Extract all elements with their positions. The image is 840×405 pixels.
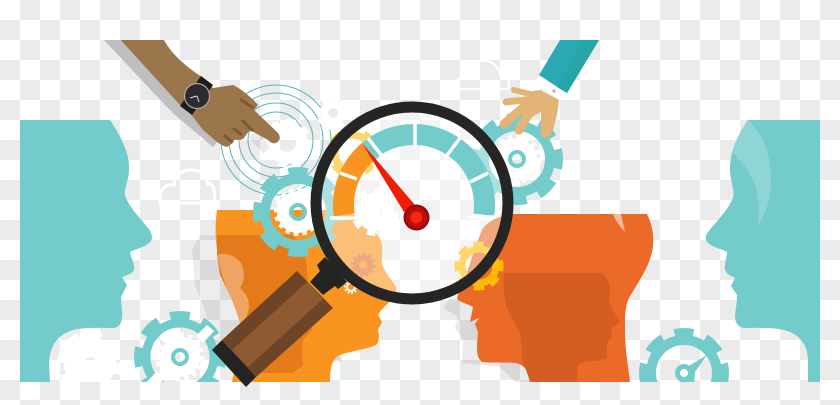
orange head [216,210,397,382]
gauge tick marks [330,122,496,218]
lens glass [316,107,508,299]
icon: white cloud right [456,61,509,89]
handle connector [310,257,347,295]
gauge needle [362,143,430,230]
inner darker head in red-orange head [503,273,620,382]
right reaching hand [504,40,599,132]
icon: small white gear at lens edge [345,281,357,293]
icon: white gear inside lens [354,191,396,233]
sleeve [539,40,599,93]
handle highlight [232,282,323,367]
red-orange head [457,214,653,382]
finger creases [224,99,253,142]
magnifier ring [316,107,508,299]
handle end cap [212,340,256,387]
highlight on red-orange head [613,214,625,232]
arm and hand [121,40,280,147]
watch face [184,84,210,108]
gauge warning arc [344,151,369,215]
left teal head silhouette [20,120,152,382]
sleeve shade [557,40,599,93]
right head highlight [733,120,771,227]
shadow of red-orange head [443,298,535,382]
pale blob in orange head [217,254,249,323]
palm [522,90,559,130]
watch hands [190,96,199,102]
icon: white cloud left [160,170,215,203]
shadow of orange head [192,235,245,345]
finger shadow [248,130,270,153]
icon: yellow gear in lens [330,130,376,176]
gauge [330,122,496,218]
icon: teal gear middle left [257,171,339,253]
icon: small orange gear in head [352,254,374,276]
left arm shadow [104,40,219,147]
left pointing hand [121,40,280,153]
shadow at orange head neck [330,347,342,362]
icon: white gear near touch rings [265,121,309,165]
icon: small white gear top [318,98,348,128]
icon: teal speedometer gear bottom right [639,328,729,382]
right teal head silhouette [706,120,820,382]
inner darker head in orange head [217,235,312,373]
cuff button [552,89,556,93]
watch strap [180,76,213,115]
icon: concentric touch rings [221,85,331,195]
icon: yellow gear on right head [457,244,501,288]
shirt cuff [533,76,567,100]
icon: teal gear top right [475,117,559,201]
gauge safe arc [369,135,484,215]
hand fingers [504,90,551,132]
icon: teal gear bottom left [138,315,222,399]
magnifier handle [212,257,347,387]
icon: white gear under left head [61,334,119,392]
wooden handle [222,271,333,377]
